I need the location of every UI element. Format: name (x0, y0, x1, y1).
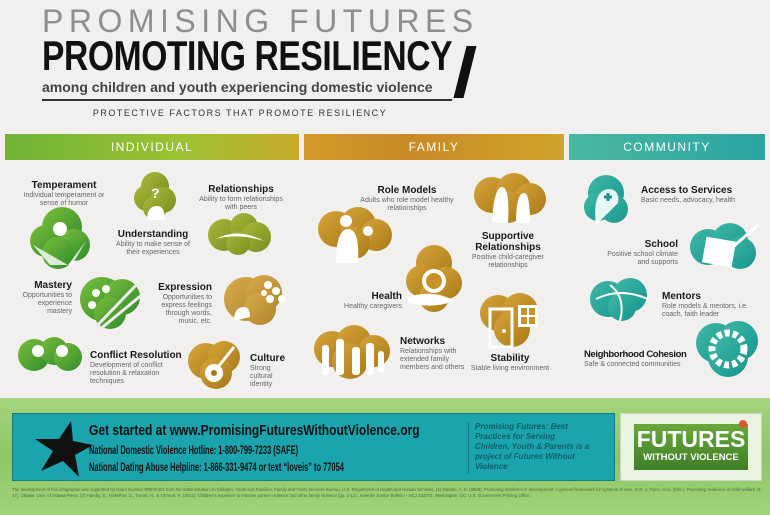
text: stability (471, 353, 549, 372)
text: mastery: Mastery (34, 280, 72, 291)
text: conflict resolution: Conflict Resolution (90, 350, 182, 361)
text: mastery: Opportunities to experience mastery (23, 292, 72, 315)
text: neighborhood cohesion: Neighborhood Cohesion (584, 349, 686, 360)
icon: temperament (30, 207, 90, 269)
text: access to services: Access to Services (641, 185, 732, 196)
text: expression: Opportunities to express feelings through words, music, etc. (161, 294, 212, 325)
icon: understanding (134, 172, 176, 220)
icon: star (35, 421, 93, 477)
text: hotline: National Domestic Violence Hotline: 1-800-799-7233 (SAFE) (89, 443, 298, 457)
text: temperament: Individual temperament or sense of humor (24, 192, 104, 207)
logo: futures without violence: FUTURES (637, 426, 745, 452)
text: neighborhood cohesion: Safe & connected communities (584, 361, 680, 368)
text: health: Health (371, 291, 402, 302)
text: stability: Stable living environment (471, 365, 549, 372)
text: culture: Strong cultural identity (250, 365, 273, 388)
text: school (607, 239, 678, 266)
text: helpline: National Dating Abuse Helpline: 1-866-331-9474 or text “loveis” to 77054 (89, 460, 344, 474)
logo: futures without violence (620, 413, 762, 481)
text: temperament (24, 180, 104, 207)
text: health: Healthy caregivers (344, 303, 402, 310)
panel: family (314, 173, 549, 379)
icon: supportive relationships (474, 173, 546, 223)
text: understanding: Ability to make sense of their experiences (116, 241, 190, 256)
text: networks: Networks (400, 336, 445, 347)
text: relationships: Ability to form relationships with peers (199, 196, 283, 211)
text: project note: Promising Futures: Best Practices for Serving Children, Youth & Parents is a project of Futures Without Violence (475, 422, 589, 471)
bar: individual: INDIVIDUAL (111, 140, 193, 154)
title: promising futures: PROMISING FUTURES (42, 3, 479, 39)
icon: understanding: ? (151, 185, 160, 201)
icon: mastery (80, 277, 140, 329)
panel: community (584, 175, 759, 377)
icon: school (690, 223, 759, 269)
text: expression: Expression (158, 282, 212, 293)
text: conflict resolution: Development of conflict resolution & relaxation techniques (90, 362, 163, 385)
bar: community: COMMUNITY (623, 140, 711, 154)
icon: conflict resolution (18, 337, 82, 371)
text: networks (400, 336, 464, 371)
text: health (344, 291, 402, 310)
text: access to services: Basic needs, advocacy, health (641, 197, 735, 204)
text: mastery (23, 280, 72, 315)
text: understanding (116, 229, 190, 256)
icon: networks (314, 325, 390, 379)
text: role models: Role Models (378, 185, 436, 196)
text: role models: Adults who role model healthy relationships (360, 197, 454, 212)
text: mentors: Role models & mentors, i.e. coach, faith leader (662, 303, 748, 318)
icon: mentors (590, 278, 648, 321)
text: mentors (662, 291, 748, 318)
icon: role models (318, 207, 392, 263)
text: culture (250, 353, 285, 388)
icon: neighborhood cohesion (696, 321, 758, 377)
text: supportive relationships: Supportive Relationships (475, 231, 541, 253)
text: access to services (641, 185, 735, 204)
text: conflict resolution (90, 350, 182, 385)
text: temperament: Temperament (32, 180, 96, 191)
text: neighborhood cohesion (584, 349, 686, 368)
icon: health (406, 245, 462, 312)
bar: family (304, 134, 564, 160)
icon: relationships (208, 213, 271, 255)
icon: stability (480, 293, 538, 348)
text: networks: Relationships with extended family members and others (400, 348, 464, 371)
text: supportive relationships: Positive child-caregiver relationships (472, 254, 544, 269)
text: culture: Culture (250, 353, 285, 364)
panel: individual (18, 172, 286, 389)
icon: access to services (584, 175, 628, 224)
footer background (0, 398, 770, 515)
text: expression (158, 282, 212, 325)
subheading: PROTECTIVE FACTORS THAT PROMOTE RESILIENCY (93, 108, 387, 118)
text: website: Get started at www.PromisingFuturesWithoutViolence.org (89, 422, 420, 439)
subtitle: among children and youth experiencing domestic violence (42, 79, 433, 95)
text: school: School (645, 239, 678, 250)
icon: culture (188, 341, 240, 389)
text: role models (360, 185, 454, 212)
title: promoting resiliency: PROMOTING RESILIENCY (42, 32, 452, 79)
panel: call to action (12, 413, 615, 481)
text: stability: Stability (491, 353, 529, 364)
text: mentors: Mentors (662, 291, 701, 302)
slash mark (454, 46, 476, 98)
text: supportive relationships (472, 231, 544, 269)
bar: family: FAMILY (409, 140, 459, 154)
bar: community (569, 134, 765, 160)
bar: individual (5, 134, 299, 160)
text: relationships: Relationships (208, 184, 274, 195)
icon: expression (224, 275, 286, 325)
text: understanding: Understanding (118, 229, 188, 240)
logo: futures without violence: WITHOUT VIOLENCE (643, 452, 739, 463)
text: school: Positive school climate and supports (607, 251, 678, 266)
text: relationships (199, 184, 283, 211)
text: footnote: The development of this infographic was supported by Grant Number 90EV0401 from the Administration on Children, Youth and Families, Family and Youth Services Bureau, U.S. Department of Health and Human Services. (1) Masten, A. S. (2006). Promoting resilience in development: A general framework for systems of care. In R. J. Flynn, et al. (Eds.), Promoting resilience in child welfare (3-17). Ottawa: Univ. of Ottawa Press. (2) Hamby, S., Finkelhor, D., Turner, H., & Ormrod, R. (2011). Children's exposure to intimate partner violence and other family violence (pp. 1-12). Juvenile Justice Bulletin - NCJ 232272. Washington, DC: U.S. Government Printing Office. (12, 487, 762, 498)
